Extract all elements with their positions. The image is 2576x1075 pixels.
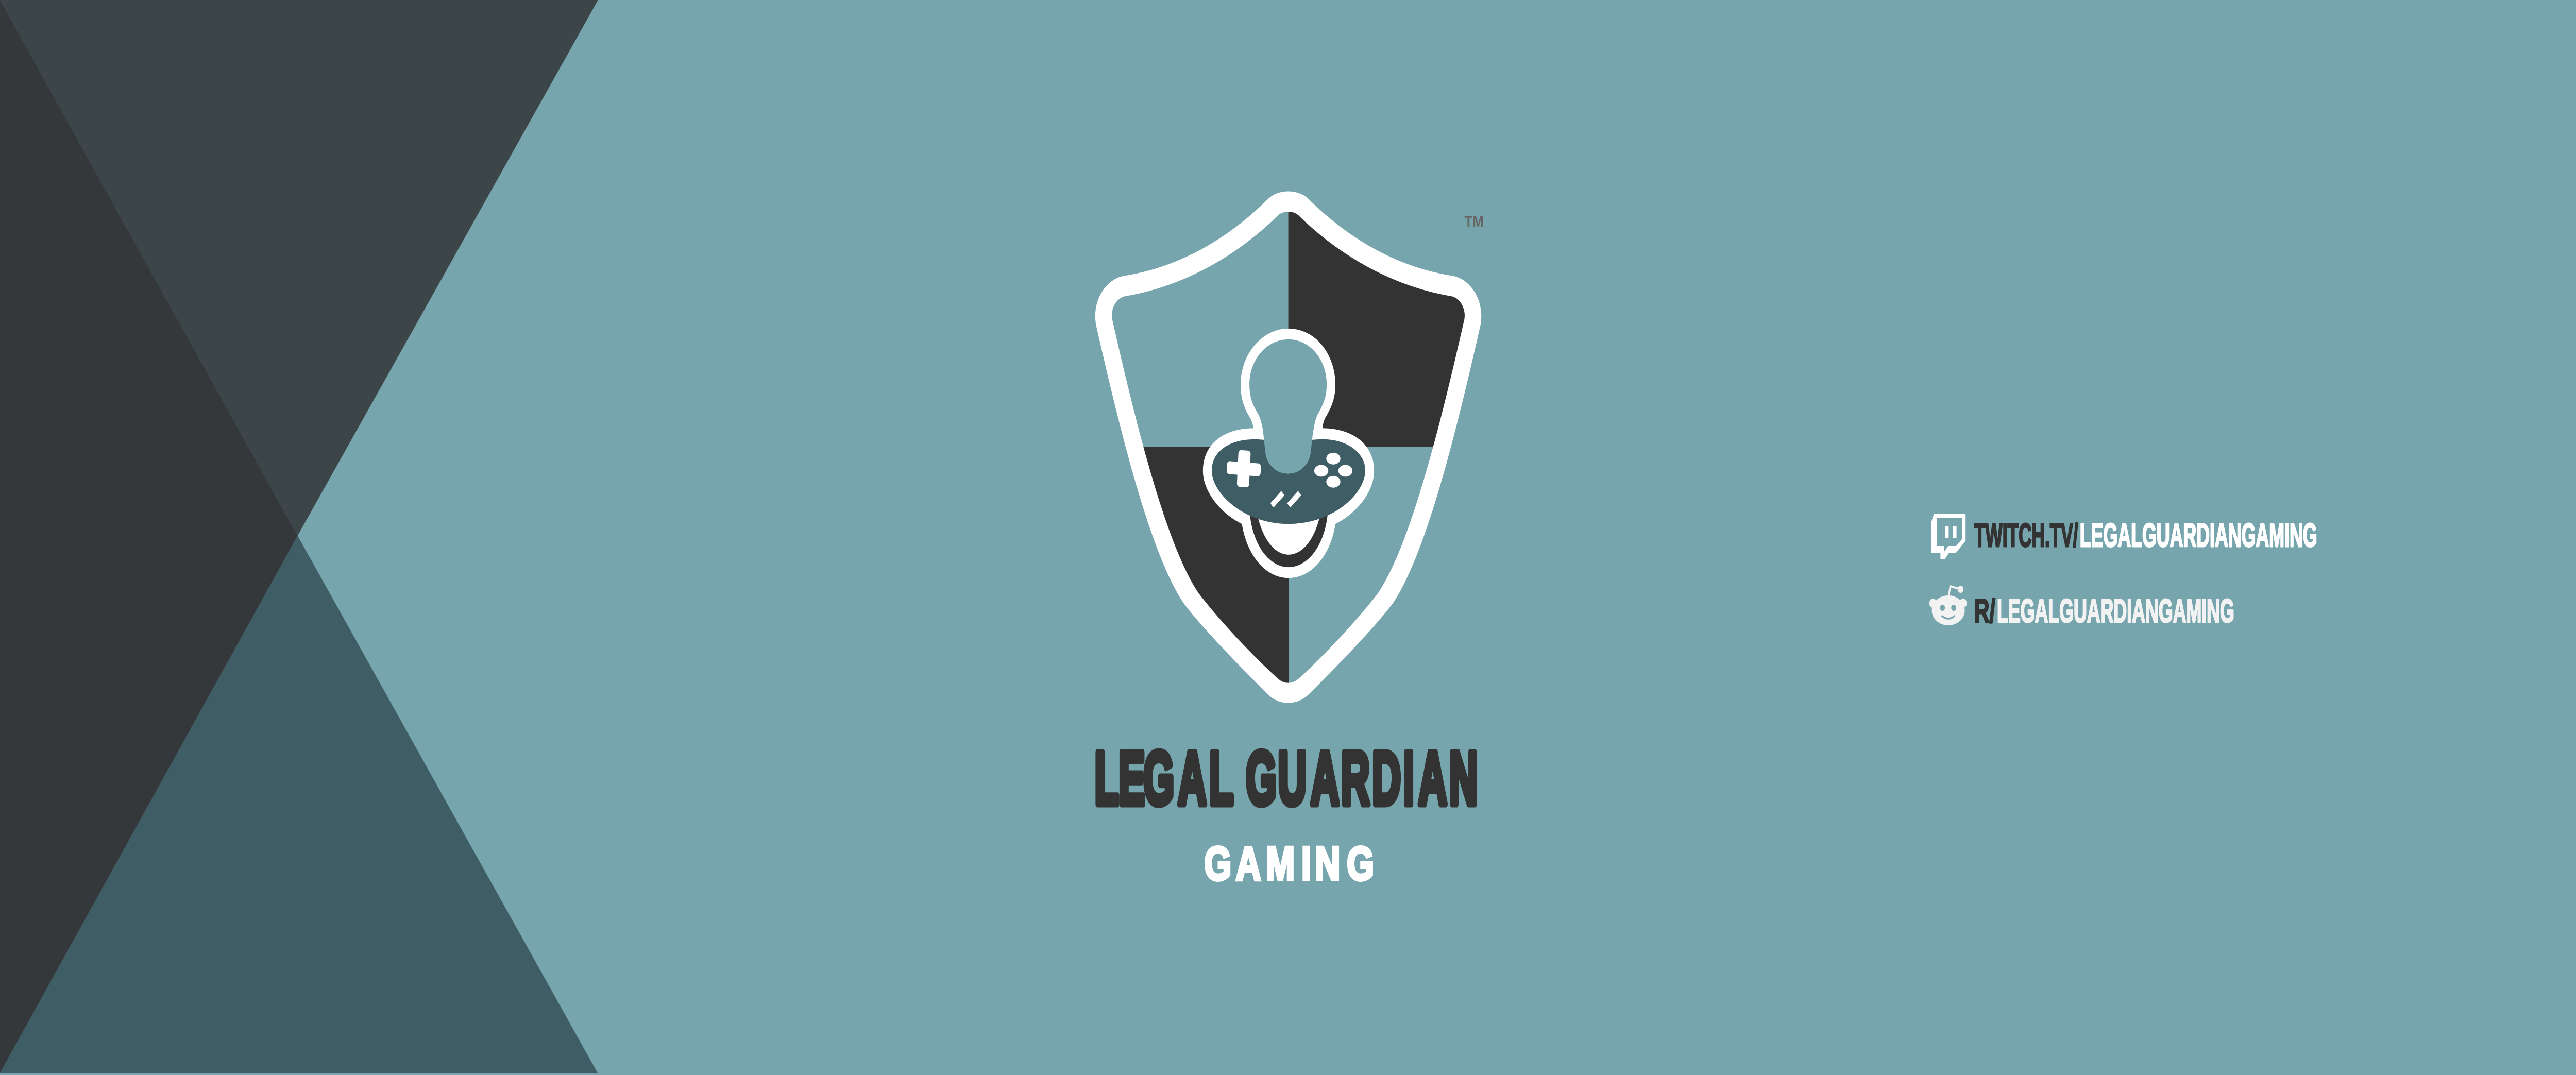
- reddit link: [1929, 586, 2234, 629]
- subtitle: GAMING: [1205, 838, 1374, 891]
- d-pad: [1226, 449, 1262, 488]
- pacifier ring centre: [1258, 517, 1319, 555]
- trademark: TM: [1464, 212, 1484, 230]
- reddit community name: LEGALGUARDIANGAMING: [1997, 593, 2234, 629]
- icon: twitch: [1931, 514, 1965, 559]
- pacifier controller: [1203, 329, 1374, 578]
- pacifier outline: [1203, 329, 1374, 578]
- left triangle: [0, 0, 298, 1073]
- top triangle: [0, 0, 598, 536]
- action buttons: [1314, 453, 1352, 488]
- pacifier bulb: [1249, 339, 1327, 474]
- title: LEGAL GUARDIAN: [1095, 736, 1478, 820]
- twitch url prefix: TWITCH.TV/: [1974, 518, 2078, 554]
- twitch link: [1931, 514, 2317, 559]
- controller body: [1212, 439, 1365, 524]
- pacifier ring: [1250, 513, 1328, 567]
- twitch channel name: LEGALGUARDIANGAMING: [2080, 518, 2317, 554]
- start and select buttons: [1270, 491, 1301, 507]
- shield outline: [1095, 191, 1481, 703]
- icon: reddit: [1929, 586, 1967, 625]
- bottom triangle: [0, 536, 598, 1073]
- logo emblem: [1095, 191, 1481, 703]
- shield: [1095, 191, 1481, 703]
- geometric triangles: [0, 0, 598, 1073]
- reddit prefix: R/: [1974, 593, 1995, 629]
- shield quarters: [1112, 212, 1465, 683]
